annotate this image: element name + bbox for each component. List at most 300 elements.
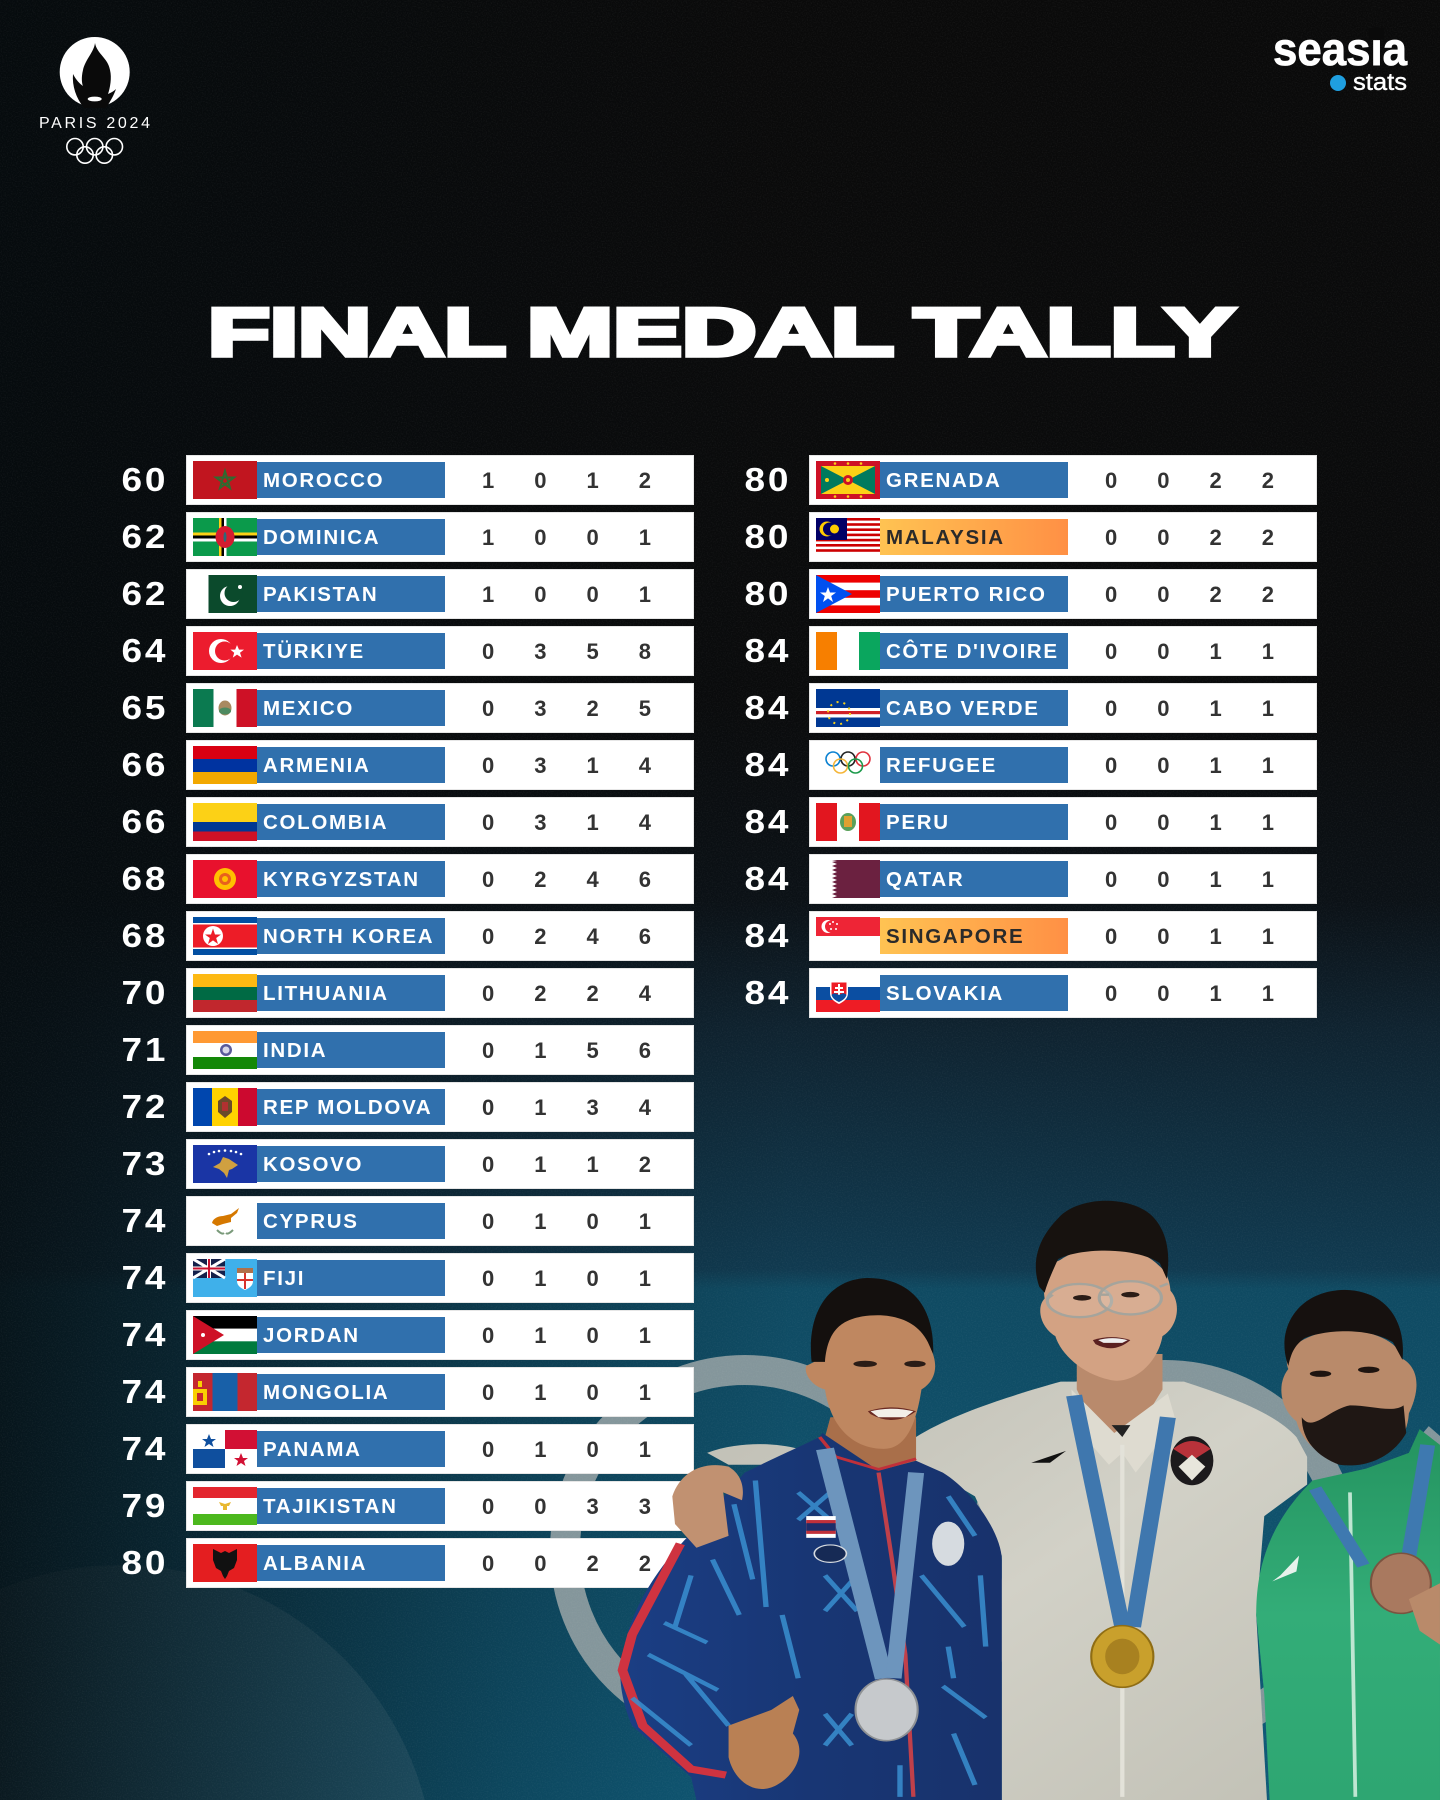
- medal counts: 1: [586, 1152, 599, 1177]
- flag: India: [193, 1031, 257, 1069]
- country name: [880, 690, 1068, 726]
- medal counts: 0: [1157, 582, 1170, 607]
- flag: Kosovo: [193, 1145, 257, 1183]
- medal counts: 1: [1262, 696, 1274, 721]
- rank: 84: [745, 689, 791, 726]
- logo: seasia stats: seasia: [1273, 23, 1407, 75]
- country name: LITHUANIA: [263, 982, 389, 1005]
- medal counts: [462, 1310, 671, 1360]
- medal counts: 0: [534, 468, 546, 493]
- country name: [257, 1032, 445, 1068]
- medal counts: 1: [1262, 810, 1274, 835]
- country name: PUERTO RICO: [886, 583, 1047, 606]
- medal counts: 2: [1262, 582, 1274, 607]
- medal counts: 0: [482, 753, 494, 778]
- medal counts: [1085, 911, 1294, 961]
- country name: [257, 576, 445, 612]
- row: India: [122, 1025, 694, 1075]
- country name: ARMENIA: [263, 754, 371, 777]
- rank: 74: [122, 1373, 168, 1410]
- country name: [880, 462, 1068, 498]
- country name: TÜRKIYE: [263, 640, 365, 663]
- medal counts: 1: [639, 1209, 651, 1234]
- medal counts: 1: [586, 468, 599, 493]
- medal counts: 0: [482, 810, 494, 835]
- medal counts: 1: [534, 1095, 546, 1120]
- medal counts: 1: [1262, 981, 1274, 1006]
- medal counts: 0: [534, 1494, 546, 1519]
- flag: Singapore: [816, 917, 880, 955]
- country name: JORDAN: [263, 1324, 360, 1347]
- medal counts: 0: [1105, 810, 1117, 835]
- medal counts: 1: [534, 1152, 546, 1177]
- medal counts: [1085, 626, 1294, 676]
- row: Refugee: [733, 740, 1317, 790]
- medal counts: 0: [1105, 582, 1117, 607]
- medal counts: 5: [639, 696, 651, 721]
- country name: [257, 1317, 445, 1353]
- medal counts: 1: [1210, 639, 1222, 664]
- country name: COLOMBIA: [263, 811, 388, 834]
- country name: KYRGYZSTAN: [263, 868, 420, 891]
- row: Mexico: [122, 683, 694, 733]
- medal counts: 0: [482, 1209, 494, 1234]
- medal counts: 1: [586, 753, 599, 778]
- medal counts: 4: [639, 1095, 651, 1120]
- medal counts: 0: [482, 981, 494, 1006]
- center athlete: [707, 1201, 1307, 1800]
- medal counts: 0: [1105, 639, 1117, 664]
- medal counts: 1: [639, 582, 651, 607]
- medal counts: 1: [482, 468, 494, 493]
- medal counts: 4: [586, 924, 599, 949]
- flag: Fiji: [193, 1259, 257, 1297]
- row: Grenada: [733, 455, 1317, 505]
- medal counts: 2: [1210, 525, 1222, 550]
- left athlete: [620, 1278, 1002, 1800]
- medal counts: [1085, 797, 1294, 847]
- country name: [257, 1488, 445, 1524]
- medal counts: 1: [1262, 924, 1274, 949]
- rank: 66: [122, 803, 168, 840]
- medal counts: 1: [534, 1209, 546, 1234]
- row: Türkiye: [122, 626, 694, 676]
- country name: [257, 804, 445, 840]
- rank: 79: [122, 1487, 168, 1524]
- country name: REFUGEE: [886, 754, 997, 777]
- medal counts: 0: [482, 1152, 494, 1177]
- medal counts: 1: [482, 525, 494, 550]
- flag: Mongolia: [193, 1373, 257, 1411]
- country name: SLOVAKIA: [886, 982, 1004, 1005]
- country name: FIJI: [263, 1267, 305, 1290]
- medal counts: [482, 1095, 651, 1120]
- medal counts: [1085, 968, 1294, 1018]
- medal counts: 0: [586, 1380, 599, 1405]
- rank: 84: [745, 746, 791, 783]
- medal counts: 0: [482, 1380, 494, 1405]
- flag: Türkiye: [193, 632, 257, 670]
- country name: [257, 1146, 445, 1182]
- country name: [257, 519, 445, 555]
- country name: [257, 1374, 445, 1410]
- country name: SINGAPORE: [886, 925, 1024, 948]
- medal counts: [462, 1481, 671, 1531]
- medal counts: 2: [534, 981, 546, 1006]
- medal counts: 2: [639, 1152, 651, 1177]
- medal counts: [462, 1253, 671, 1303]
- medal counts: 2: [586, 1551, 599, 1576]
- medal counts: 0: [586, 582, 599, 607]
- medal counts: 4: [586, 867, 599, 892]
- row: Panama: [110, 1424, 694, 1474]
- country name: MALAYSIA: [886, 526, 1005, 549]
- flag: Morocco: [193, 461, 257, 499]
- medal counts: 3: [586, 1494, 599, 1519]
- medal counts: [462, 1196, 671, 1246]
- medal counts: 2: [534, 924, 546, 949]
- medal counts: 1: [1210, 981, 1222, 1006]
- rank: 84: [745, 632, 791, 669]
- rank: 71: [122, 1031, 168, 1068]
- country name: REP MOLDOVA: [263, 1096, 432, 1119]
- row: Pakistan: [122, 569, 694, 619]
- medal counts: 0: [586, 1209, 599, 1234]
- country name: MOROCCO: [263, 469, 384, 492]
- flag: Mexico: [193, 689, 257, 727]
- medal counts: 1: [639, 1266, 651, 1291]
- row: Qatar: [733, 854, 1317, 904]
- flag: North Korea: [193, 917, 257, 955]
- rank: 84: [745, 917, 791, 954]
- medal counts: 2: [1210, 468, 1222, 493]
- rank: 64: [122, 632, 168, 669]
- country name: [257, 861, 445, 897]
- country name: [257, 1089, 445, 1125]
- country name: GRENADA: [886, 469, 1002, 492]
- medal counts: 2: [639, 468, 651, 493]
- row: Morocco: [122, 455, 694, 505]
- row: Tajikistan: [110, 1481, 694, 1531]
- country name: [257, 633, 445, 669]
- medal counts: [482, 924, 651, 949]
- flag: Armenia: [193, 746, 257, 784]
- medal counts: 0: [1157, 525, 1170, 550]
- medal counts: 0: [482, 1038, 494, 1063]
- country name: ALBANIA: [263, 1552, 367, 1575]
- rank: 74: [122, 1259, 168, 1296]
- row: Fiji: [110, 1253, 694, 1303]
- flag: Grenada: [816, 461, 880, 499]
- medal counts: 0: [1105, 468, 1117, 493]
- medal counts: 0: [1105, 696, 1117, 721]
- rank: 62: [122, 575, 168, 612]
- medal counts: 0: [1157, 981, 1170, 1006]
- row: Singapore: [733, 911, 1317, 961]
- medal counts: 2: [1210, 582, 1222, 607]
- row: Kyrgyzstan: [122, 854, 694, 904]
- medal counts: 2: [1262, 468, 1274, 493]
- medal counts: 5: [586, 639, 599, 664]
- flag: Tajikistan: [193, 1487, 257, 1525]
- flag: Côte d'Ivoire: [816, 632, 880, 670]
- country name: PANAMA: [263, 1438, 362, 1461]
- country name: MONGOLIA: [263, 1381, 389, 1404]
- rank: 68: [122, 860, 168, 897]
- medal counts: 6: [639, 867, 651, 892]
- country name: CÔTE D'IVOIRE: [886, 640, 1059, 663]
- row: Cabo Verde: [733, 683, 1317, 733]
- medal counts: [1085, 854, 1294, 904]
- medal counts: 0: [482, 867, 494, 892]
- medal counts: 0: [586, 1266, 599, 1291]
- row: Peru: [733, 797, 1317, 847]
- flag: Kyrgyzstan: [193, 860, 257, 898]
- flag: Cyprus: [193, 1202, 257, 1240]
- rank: 84: [745, 803, 791, 840]
- rank: 73: [122, 1145, 168, 1182]
- rank: 68: [122, 917, 168, 954]
- medal counts: 0: [482, 924, 494, 949]
- medal counts: [482, 810, 651, 835]
- medal counts: 5: [586, 1038, 599, 1063]
- medal counts: 1: [534, 1266, 546, 1291]
- flag: Qatar: [816, 860, 880, 898]
- medal counts: [482, 468, 651, 493]
- country name: [880, 804, 1068, 840]
- rank: 72: [122, 1088, 168, 1125]
- medal counts: 3: [534, 810, 546, 835]
- country name: [257, 1260, 445, 1296]
- medal counts: 0: [482, 1266, 494, 1291]
- medal counts: 2: [1262, 525, 1274, 550]
- country name: [257, 1203, 445, 1239]
- row: Lithuania: [122, 968, 694, 1018]
- flag: Peru: [816, 803, 880, 841]
- medal counts: 3: [639, 1494, 651, 1519]
- medal counts: 1: [639, 525, 651, 550]
- rank: 66: [122, 746, 168, 783]
- medal counts: 0: [1157, 639, 1170, 664]
- medal counts: 0: [534, 582, 546, 607]
- medal counts: 3: [586, 1095, 599, 1120]
- row: Slovakia: [733, 968, 1317, 1018]
- row: Colombia: [122, 797, 694, 847]
- medal counts: [482, 753, 651, 778]
- medal counts: 0: [1105, 981, 1117, 1006]
- row: Malaysia: [733, 512, 1317, 562]
- medal counts: 3: [534, 753, 546, 778]
- medal counts: [482, 582, 651, 607]
- medal counts: [482, 1038, 651, 1063]
- medal counts: 0: [1105, 525, 1117, 550]
- rank: 65: [122, 689, 168, 726]
- medal counts: 0: [1157, 867, 1170, 892]
- right athlete: [1256, 1290, 1440, 1800]
- flag: Cabo Verde: [816, 689, 880, 727]
- flag: Lithuania: [193, 974, 257, 1012]
- medal counts: 0: [482, 696, 494, 721]
- medal counts: 2: [586, 696, 599, 721]
- row: Puerto Rico: [733, 569, 1317, 619]
- country name: [257, 1545, 445, 1581]
- medal counts: 1: [534, 1038, 546, 1063]
- medal counts: 1: [534, 1323, 546, 1348]
- medal counts: [482, 867, 651, 892]
- rank: 74: [122, 1202, 168, 1239]
- medal counts: 0: [482, 1551, 494, 1576]
- medal counts: 0: [482, 1437, 494, 1462]
- flag: Puerto Rico: [816, 575, 880, 613]
- medal counts: 1: [639, 1437, 651, 1462]
- flag: Dominica: [193, 518, 257, 556]
- medal counts: 0: [586, 1323, 599, 1348]
- country name: [257, 1431, 445, 1467]
- medal counts: 2: [534, 867, 546, 892]
- title: [208, 295, 1240, 365]
- medal counts: [1085, 740, 1294, 790]
- row: Dominica: [122, 512, 694, 562]
- medal counts: [1085, 569, 1294, 619]
- row: Rep Moldova: [122, 1082, 694, 1132]
- medal counts: 0: [1157, 696, 1170, 721]
- row: Cyprus: [110, 1196, 694, 1246]
- country name: [257, 747, 445, 783]
- country name: [880, 519, 1068, 555]
- rank: 62: [122, 518, 168, 555]
- medal counts: 1: [1210, 810, 1222, 835]
- flag: Colombia: [193, 803, 257, 841]
- country name: CYPRUS: [263, 1210, 359, 1233]
- flag: Slovakia: [816, 974, 880, 1012]
- medal counts: 3: [534, 696, 546, 721]
- country name: [880, 861, 1068, 897]
- medal counts: 1: [1210, 924, 1222, 949]
- country name: KOSOVO: [263, 1153, 363, 1176]
- medal counts: 0: [1157, 924, 1170, 949]
- medal counts: 4: [639, 810, 651, 835]
- medal counts: 1: [1210, 753, 1222, 778]
- row: Côte d'Ivoire: [733, 626, 1317, 676]
- country name: [257, 918, 445, 954]
- flag: Pakistan: [208, 575, 257, 613]
- flag: Jordan: [193, 1316, 257, 1354]
- medal counts: 0: [482, 1323, 494, 1348]
- rank: 60: [122, 461, 168, 498]
- country name: CABO VERDE: [886, 697, 1040, 720]
- medal counts: 4: [639, 753, 651, 778]
- country name: [880, 747, 1068, 783]
- rank: 84: [745, 974, 791, 1011]
- row: North Korea: [122, 911, 694, 961]
- medal counts: 0: [1105, 867, 1117, 892]
- country name: MEXICO: [263, 697, 354, 720]
- medal counts: 1: [482, 582, 494, 607]
- medal counts: 0: [1157, 810, 1170, 835]
- medal counts: 0: [1105, 753, 1117, 778]
- medal counts: [462, 1139, 671, 1189]
- country name: [880, 576, 1068, 612]
- medal counts: 1: [534, 1380, 546, 1405]
- rank: 80: [745, 575, 791, 612]
- logo: Paris 2024: [39, 37, 150, 164]
- country name: DOMINICA: [263, 526, 380, 549]
- country name: QATAR: [886, 868, 964, 891]
- center athlete hand on shoulder: [672, 1465, 743, 1548]
- medal counts: 1: [1262, 867, 1274, 892]
- medal counts: 1: [586, 810, 599, 835]
- medal counts: 0: [586, 1437, 599, 1462]
- medal counts: 2: [586, 981, 599, 1006]
- country name: [880, 918, 1068, 954]
- rank: 80: [745, 461, 791, 498]
- medal counts: 8: [639, 639, 651, 664]
- medal counts: 0: [1157, 753, 1170, 778]
- logo: seasia stats: [1273, 23, 1408, 96]
- rank: 84: [745, 860, 791, 897]
- medal counts: 1: [534, 1437, 546, 1462]
- medal counts: 1: [1210, 867, 1222, 892]
- medal counts: 1: [639, 1380, 651, 1405]
- medal counts: [1085, 512, 1294, 562]
- medal counts: 0: [1157, 468, 1170, 493]
- country name: NORTH KOREA: [263, 925, 434, 948]
- country name: TAJIKISTAN: [263, 1495, 398, 1518]
- medal counts: 1: [1210, 696, 1222, 721]
- medal counts: [482, 981, 651, 1006]
- medal counts: [462, 1367, 671, 1417]
- row: Albania: [110, 1538, 694, 1588]
- country name: PAKISTAN: [263, 583, 378, 606]
- row: Mongolia: [110, 1367, 694, 1417]
- country name: [880, 975, 1068, 1011]
- rank: 74: [122, 1316, 168, 1353]
- flag: Panama: [193, 1430, 257, 1468]
- medal counts: 0: [482, 639, 494, 664]
- flag: Refugee Olympic rings: [816, 746, 880, 784]
- flag: Malaysia: [816, 518, 880, 556]
- medal counts: 0: [1105, 924, 1117, 949]
- medal counts: 2: [639, 1551, 651, 1576]
- medal counts: 1: [639, 1323, 651, 1348]
- country name: [257, 975, 445, 1011]
- row: Armenia: [122, 740, 694, 790]
- country name: PERU: [886, 811, 950, 834]
- medal counts: 0: [482, 1095, 494, 1120]
- medal counts: 1: [1262, 639, 1274, 664]
- logo: seasia stats: stats: [1353, 69, 1407, 96]
- medal counts: 6: [639, 924, 651, 949]
- medal counts: 0: [534, 525, 546, 550]
- medal counts: [482, 639, 651, 664]
- medal counts: 0: [482, 1494, 494, 1519]
- medal counts: 6: [639, 1038, 651, 1063]
- row: Jordan: [110, 1310, 694, 1360]
- rank: 80: [122, 1544, 168, 1581]
- row: Kosovo: [122, 1139, 694, 1189]
- rank: 70: [122, 974, 168, 1011]
- medal counts: 0: [534, 1551, 546, 1576]
- country name: [257, 690, 445, 726]
- rank: 74: [122, 1430, 168, 1467]
- medal counts: [1085, 683, 1294, 733]
- medal counts: [482, 525, 651, 550]
- medal counts: [462, 1424, 671, 1474]
- flag: Rep Moldova: [193, 1088, 257, 1126]
- medal counts: [482, 696, 651, 721]
- medal counts: [462, 1538, 671, 1588]
- medal counts: 0: [586, 525, 599, 550]
